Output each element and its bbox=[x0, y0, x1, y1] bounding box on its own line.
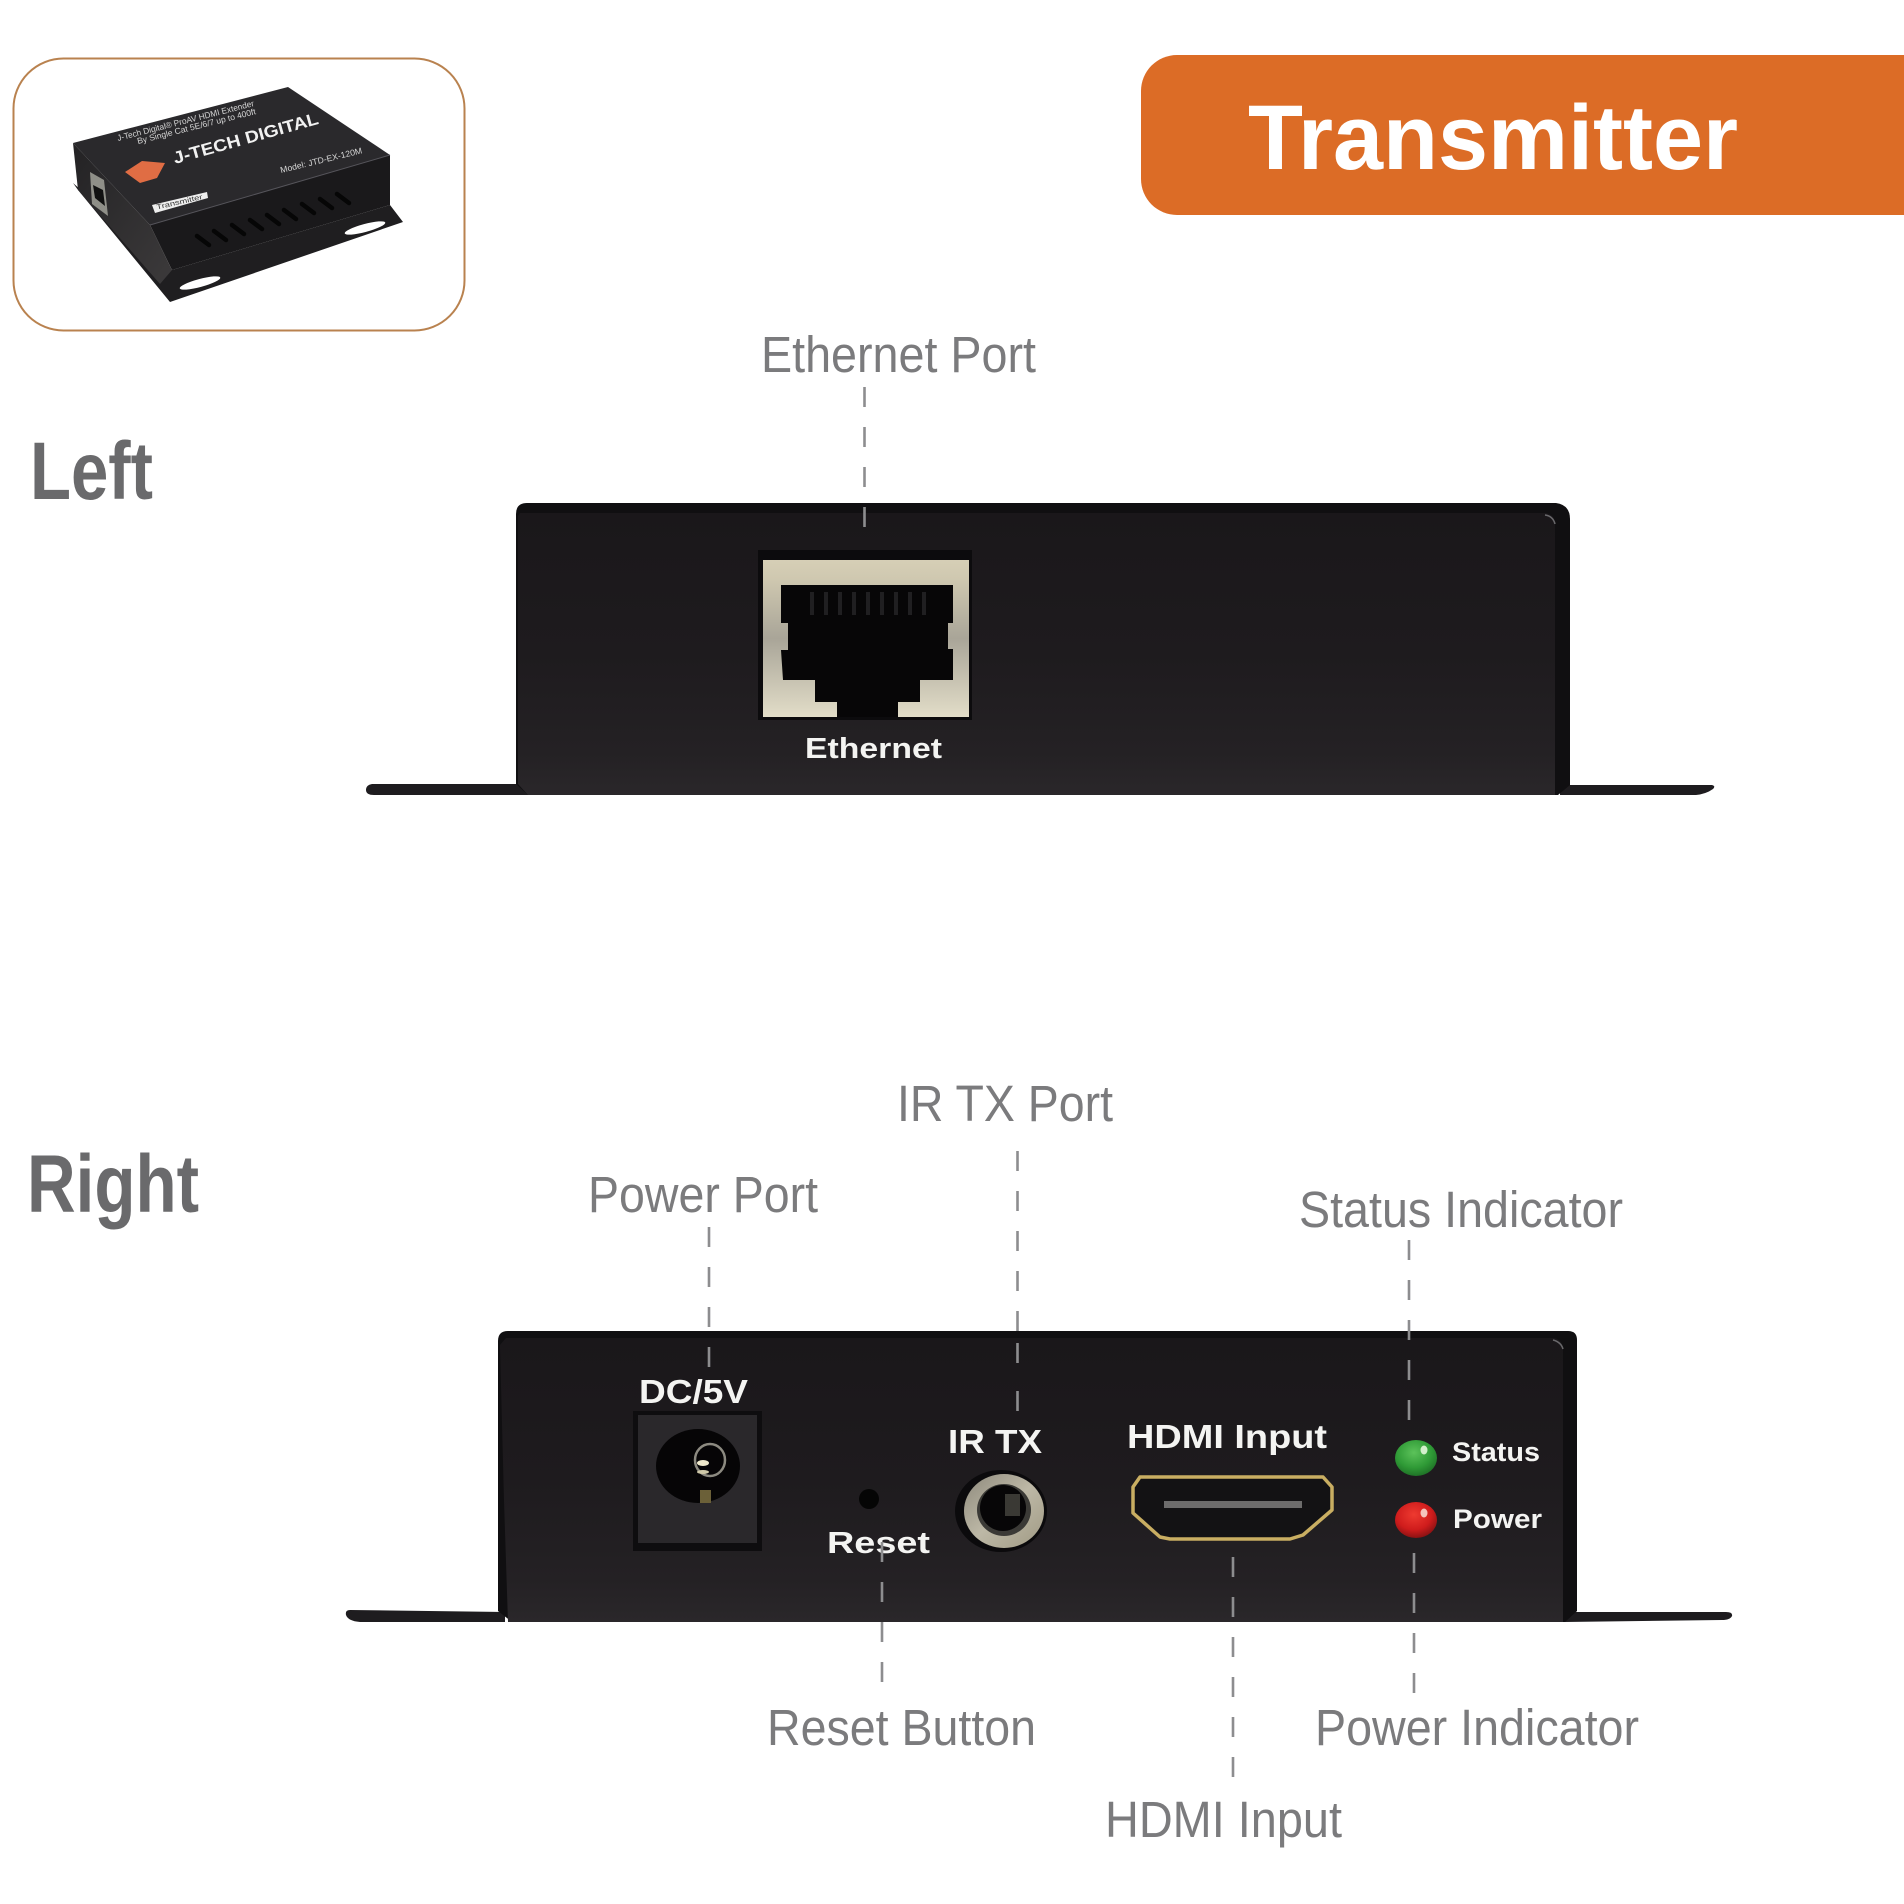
label: Status Indicator: Status Indicator bbox=[1299, 1181, 1623, 1238]
printed label: DC/5V: DC/5V bbox=[639, 1373, 748, 1410]
callout line: Status Indicator bbox=[1408, 1240, 1410, 1420]
panel: left side of device bbox=[366, 503, 1714, 795]
panel: right side of device bbox=[346, 1331, 1732, 1622]
label: Power Port: Power Port bbox=[588, 1166, 818, 1223]
device flanges bbox=[346, 1610, 1732, 1622]
heading: Right: Right bbox=[27, 1139, 199, 1230]
status LED bbox=[1395, 1440, 1437, 1476]
thumbnail frame bbox=[14, 58, 464, 330]
power LED bbox=[1395, 1502, 1437, 1538]
IR jack bbox=[955, 1470, 1047, 1552]
reset hole bbox=[859, 1489, 879, 1509]
device shell bbox=[516, 503, 1570, 795]
ethernet port bbox=[758, 550, 972, 720]
printed label: IR TX: IR TX bbox=[948, 1423, 1042, 1460]
printed label: Status: Status bbox=[1452, 1437, 1540, 1467]
heading: Left: Left bbox=[30, 426, 153, 517]
thumbnail device: Model: JTD-EX-120M bbox=[279, 145, 363, 175]
printed label: Reset: Reset bbox=[827, 1525, 930, 1560]
label: Ethernet Port: Ethernet Port bbox=[761, 326, 1036, 383]
callout line: Ethernet Port bbox=[863, 387, 866, 527]
thumbnail device: J-TECH DIGITAL bbox=[171, 109, 321, 168]
callout line: Power Port bbox=[708, 1227, 710, 1367]
callout line: HDMI Input bbox=[1232, 1557, 1234, 1777]
thumbnail device: J-Tech Digital® ProAV HDMI Extender bbox=[116, 98, 255, 143]
device face bbox=[500, 1338, 1563, 1622]
thumbnail device bbox=[73, 87, 403, 302]
device face bbox=[518, 513, 1555, 795]
printed label: HDMI Input: HDMI Input bbox=[1127, 1418, 1327, 1455]
printed label: Power: Power bbox=[1453, 1504, 1543, 1534]
banner: Transmitter bbox=[1141, 55, 1904, 215]
power jack bbox=[633, 1411, 762, 1551]
printed label: Ethernet: Ethernet bbox=[805, 733, 942, 765]
HDMI port bbox=[1133, 1477, 1332, 1539]
callout line: IR TX Port bbox=[1016, 1151, 1019, 1411]
device shell bbox=[498, 1331, 1577, 1622]
thumbnail device: By Single Cat 5E/6/7 up to 400ft bbox=[136, 106, 257, 146]
device flanges bbox=[366, 784, 1714, 795]
label: IR TX Port: IR TX Port bbox=[897, 1075, 1113, 1132]
label: Reset Button: Reset Button bbox=[767, 1699, 1036, 1756]
label: HDMI Input: HDMI Input bbox=[1105, 1791, 1342, 1848]
label: Power Indicator: Power Indicator bbox=[1315, 1699, 1639, 1756]
banner: Transmitter: Transmitter bbox=[1248, 87, 1738, 189]
panel: product thumbnail bbox=[14, 58, 464, 330]
callout line: Reset Button bbox=[881, 1542, 883, 1682]
thumbnail device: Transmitter bbox=[156, 194, 204, 211]
callout line: Power Indicator bbox=[1413, 1553, 1415, 1693]
